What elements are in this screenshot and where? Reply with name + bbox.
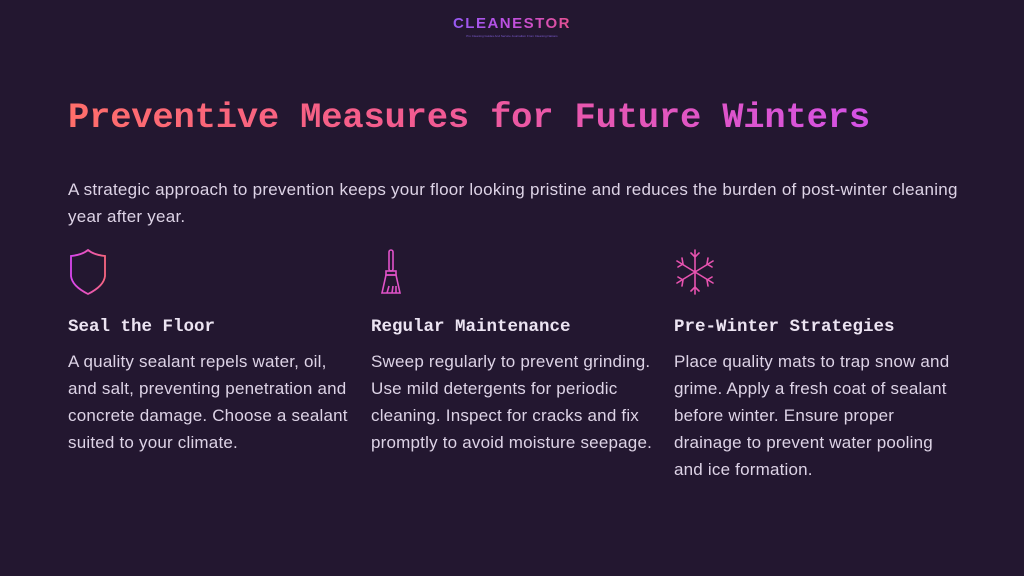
body: Place quality mats to trap snow and [674,352,949,371]
intro text: A strategic approach to prevention keeps your floor looking pristine and reduces the burden of post-winter cleaning [68,180,958,199]
icon: shield [70,248,106,295]
body: before winter. Ensure proper [674,406,894,425]
panel: pre-winter strategies [674,249,949,479]
body: Sweep regularly to prevent grinding. [371,352,650,371]
panel: seal the floor [68,248,348,452]
logo: CLEANESTOR [453,15,571,32]
logo: Pro Cleaning Guides And Service Journalism From Cleaning Nations [466,34,558,38]
heading: Seal the Floor [68,317,215,337]
body: cleaning. Inspect for cracks and fix [371,406,639,425]
body: and salt, preventing penetration and [68,379,346,398]
title: Preventive Measures for Future Winters [68,97,870,138]
icon: broom [381,249,401,294]
icon: snowflake [676,249,714,295]
body: drainage to prevent water pooling [674,433,933,452]
panel: regular maintenance [371,249,652,452]
body: concrete damage. Choose a sealant [68,406,348,425]
heading: Pre-Winter Strategies [674,317,895,337]
intro text [68,180,958,226]
body: A quality sealant repels water, oil, [68,352,327,371]
body [674,352,949,479]
heading: Regular Maintenance [371,317,571,337]
intro text: year after year. [68,207,185,226]
body: Use mild detergents for periodic [371,379,617,398]
body: promptly to avoid moisture seepage. [371,433,652,452]
body [68,352,348,452]
body: grime. Apply a fresh coat of sealant [674,379,947,398]
body: and ice formation. [674,460,813,479]
body [371,352,652,452]
body: suited to your climate. [68,433,238,452]
